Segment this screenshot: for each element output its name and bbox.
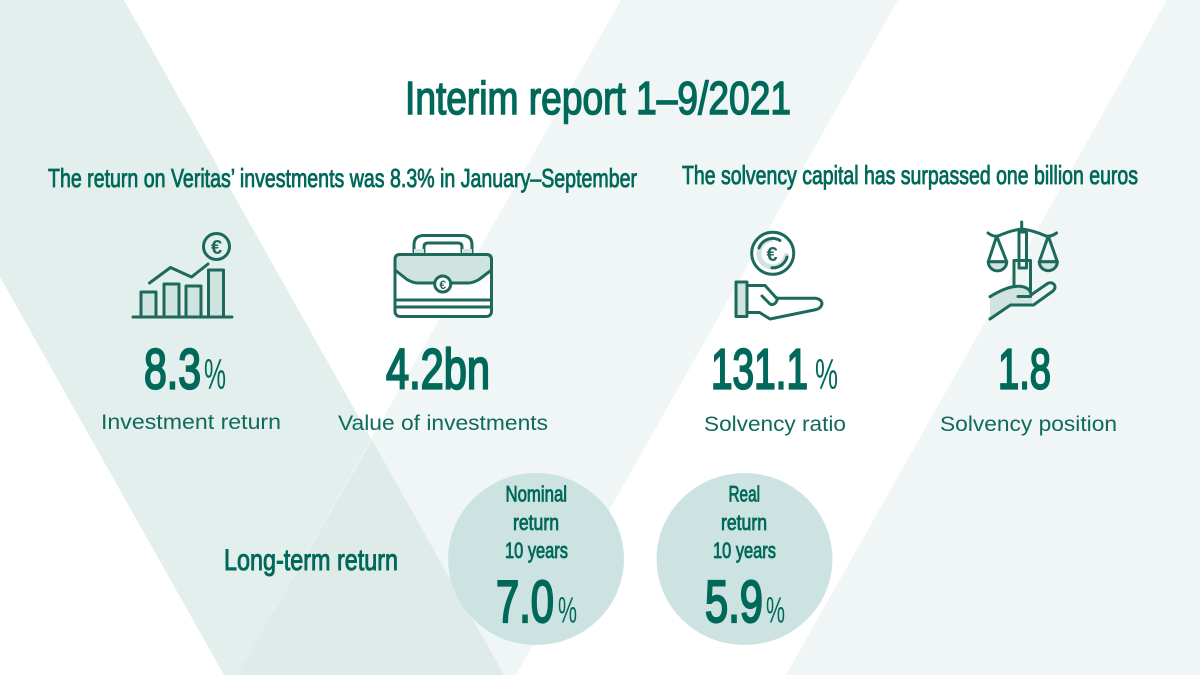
stat: solvency ratio: 131.1: [711, 338, 808, 402]
stat: solvency ratio: [704, 338, 846, 436]
heading: investments: The return on Veritas’ investments was 8.3% in January–September: [48, 163, 637, 193]
circle: nominal return: [448, 473, 624, 645]
circle: real return: %: [766, 590, 785, 630]
icon: hand holding coin: €: [766, 244, 778, 266]
icon: briefcase: €: [439, 278, 446, 292]
circle: nominal return: 7.0: [496, 569, 554, 635]
stat: investment return: [101, 338, 281, 434]
icon: bar chart with euro coin: €: [211, 237, 222, 259]
stat: value of investments: Value of investments: [338, 412, 548, 435]
circle: real return: Real: [728, 482, 760, 506]
stat: solvency position: 1.8: [998, 338, 1051, 402]
circle: real return: 5.9: [705, 569, 763, 635]
circle: real return: 10 years: [713, 538, 776, 563]
stat: solvency ratio: %: [815, 351, 838, 399]
stat: value of investments: 4.2bn: [386, 338, 490, 402]
circle: real return: return: [721, 510, 767, 535]
circle: nominal return: Nominal: [506, 482, 567, 506]
stat: solvency ratio: Solvency ratio: [704, 413, 846, 436]
stat: solvency position: Solvency position: [940, 413, 1117, 436]
stat: investment return: Investment return: [101, 411, 281, 434]
icon: briefcase: [395, 236, 492, 316]
circle: nominal return: return: [513, 510, 559, 535]
stat: value of investments: [338, 338, 548, 435]
heading: long-term return: Long-term return: [224, 544, 398, 577]
icon: scales in hand: [988, 222, 1057, 319]
stat: investment return: %: [204, 351, 226, 399]
stat: investment return: 8.3: [144, 338, 201, 402]
circle: nominal return: %: [558, 590, 577, 630]
icon: hand holding coin: [736, 232, 822, 319]
title: Interim report 1–9/2021: [405, 72, 791, 124]
circle: real return: [656, 473, 832, 645]
icon: bar chart with euro coin: [133, 234, 232, 317]
circle: nominal return: 10 years: [505, 538, 568, 563]
stat: solvency position: [940, 338, 1117, 436]
